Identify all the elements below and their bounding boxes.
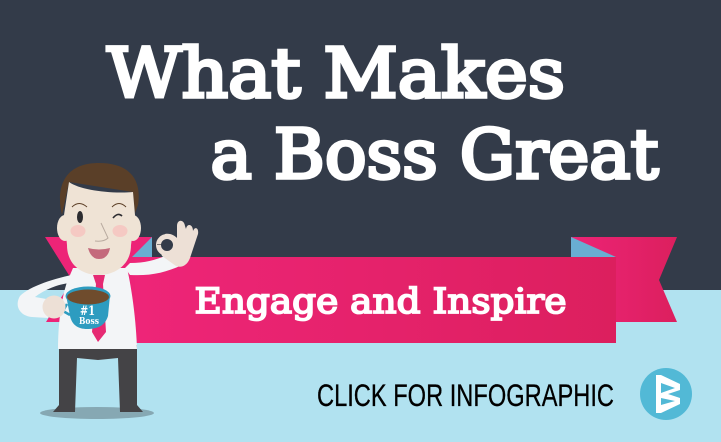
ribbon right fold <box>571 237 616 257</box>
finger ring <box>158 236 176 254</box>
title <box>107 35 658 195</box>
call to action text: CLICK FOR INFOGRAPHIC <box>317 377 614 413</box>
background: light blue lower area <box>0 290 721 442</box>
right arm <box>125 256 182 275</box>
hair <box>60 163 139 215</box>
mug rim <box>66 286 110 306</box>
finger line <box>157 244 161 246</box>
mug text <box>79 304 99 327</box>
hand holding mug <box>42 296 66 318</box>
logo mark <box>656 375 680 413</box>
logo <box>640 368 692 420</box>
left arm <box>18 274 77 318</box>
mouth <box>88 248 110 259</box>
title line 1: What Makes <box>107 35 565 114</box>
mug handle <box>63 304 70 315</box>
ribbon text: Engage and Inspire <box>194 282 566 322</box>
logo circle <box>640 368 692 420</box>
coffee <box>67 290 109 304</box>
palm and fingers <box>160 221 198 267</box>
ribbon main band <box>135 257 616 343</box>
ribbon left tail <box>45 237 152 322</box>
mug text number: #1 <box>80 304 95 319</box>
eyebrows <box>72 204 126 207</box>
left eye <box>77 211 83 223</box>
shirt torso <box>58 268 137 349</box>
ribbon left fold <box>132 237 152 257</box>
background: dark upper area <box>0 0 721 290</box>
head <box>57 163 141 275</box>
ribbon <box>45 237 677 343</box>
left ear <box>57 215 73 241</box>
coffee mug <box>63 286 110 329</box>
title line 2: a Boss Great <box>210 116 658 195</box>
nose <box>95 223 108 241</box>
winking eye <box>113 214 122 218</box>
ribbon right tail <box>571 237 677 322</box>
tie <box>92 275 106 342</box>
right ear <box>125 215 141 241</box>
shadow <box>40 407 154 419</box>
mug text word: Boss <box>79 317 99 327</box>
cheeks <box>70 225 128 237</box>
face <box>64 182 135 275</box>
character: boss with coffee mug <box>18 163 198 419</box>
ok hand <box>157 221 198 267</box>
trousers <box>53 345 143 412</box>
mug body <box>66 295 110 329</box>
